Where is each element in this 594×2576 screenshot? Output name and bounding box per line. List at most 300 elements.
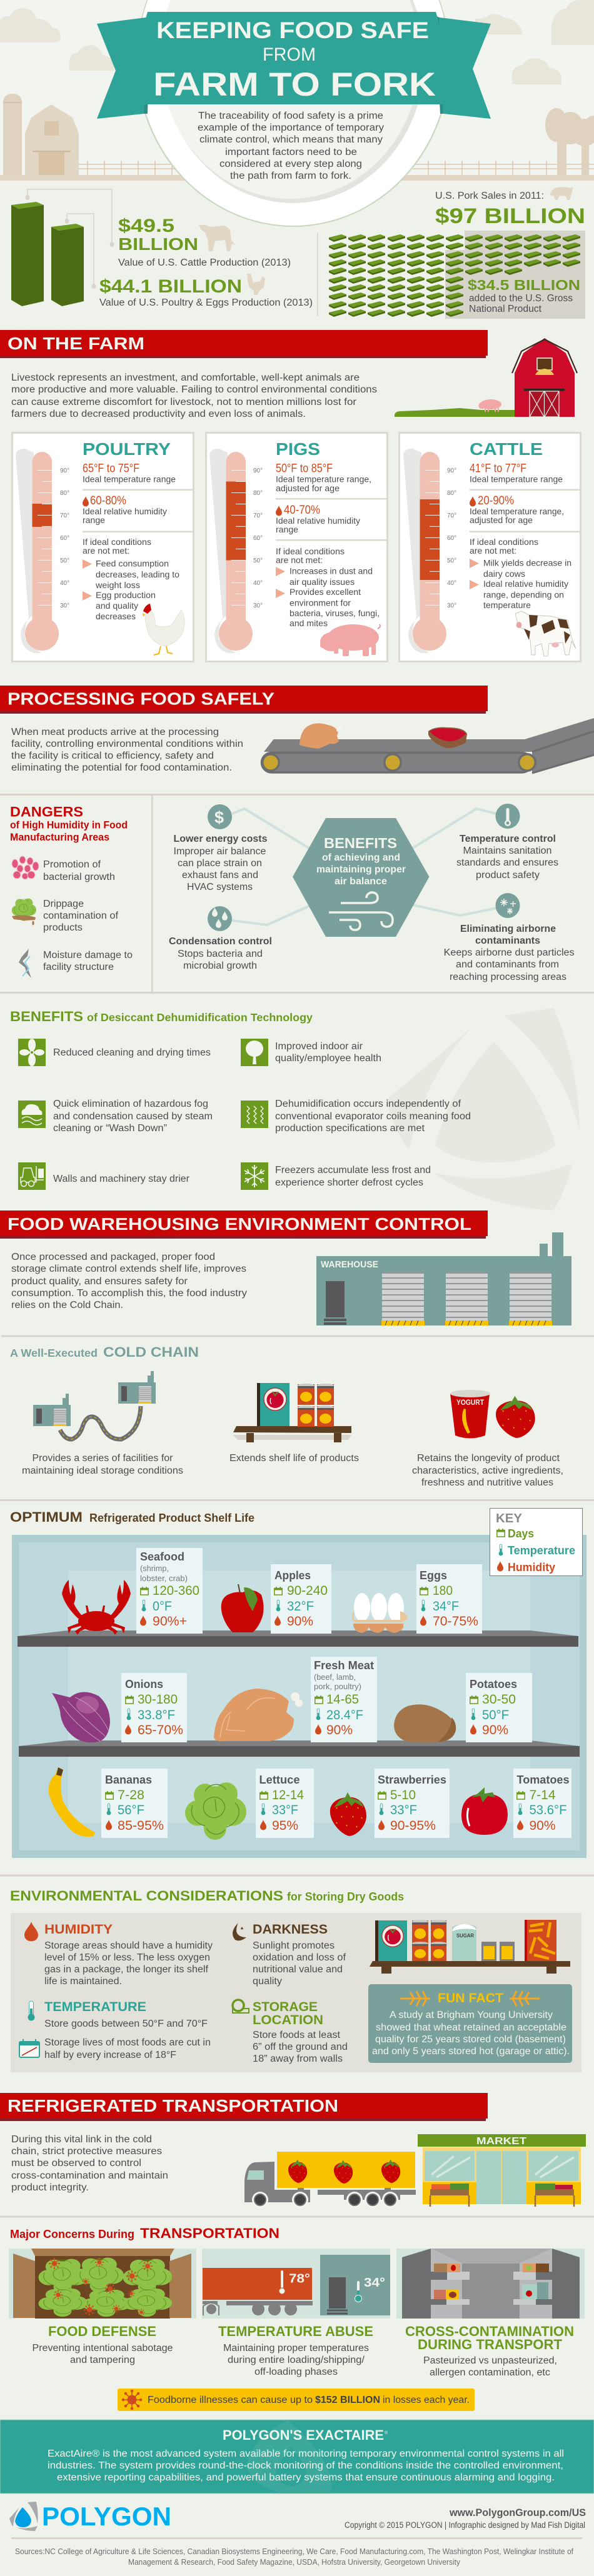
- benefit: temperature control: Temperature control: [460, 834, 556, 844]
- benefit item: fan: Reduced cleaning and drying times: [53, 1047, 211, 1058]
- temperature: TEMPERATURE: [44, 2000, 146, 2014]
- processing text: facility, controlling environmental conditions within: [11, 739, 243, 749]
- poultry temperature: 65°F to 75°F: [83, 462, 139, 475]
- warehousing text: Once processed and packaged, proper food: [11, 1252, 215, 1262]
- ribbon: [97, 12, 491, 119]
- poultry risks: and quality: [96, 601, 138, 611]
- icon: cow silhouette: [199, 225, 235, 251]
- intro text: example of the importance of temporary: [198, 122, 384, 133]
- temperature: [19, 2000, 211, 2060]
- concern: cross-contamination: CROSS-CONTAMINATION: [405, 2324, 574, 2339]
- cattle risks: dairy cows: [483, 569, 525, 579]
- panel heading: dangers: of High Humidity in Food: [10, 819, 128, 831]
- concern: food defense: Preventing intentional sabotage: [33, 2343, 173, 2354]
- cattle humidity: [470, 494, 580, 532]
- info: seafood: (shrimp,: [140, 1564, 169, 1573]
- info: bananas: 7-28: [118, 1788, 144, 1802]
- poultry thermometer: 30°: [60, 602, 69, 609]
- cattle thermometer: 90°: [447, 467, 456, 474]
- processing text: the facility is critical to efficiency, safety and: [11, 751, 214, 761]
- stat: cattle: Value of U.S. Cattle Production (2013): [118, 257, 291, 268]
- icon: pig silhouette: [550, 187, 573, 200]
- danger: bacterial growth: Promotion of: [43, 859, 101, 870]
- benefit item: snowflake: [241, 1162, 431, 1190]
- concern: food defense: FOOD DEFENSE: [48, 2324, 156, 2339]
- danger: drippage: products: [43, 922, 83, 933]
- panel heading: dangers: DANGERS: [10, 804, 83, 820]
- benefit item: coils: production specifications are met: [275, 1123, 425, 1134]
- pictogram: money stacks: [329, 231, 585, 319]
- heading: desiccant benefits: [10, 1009, 313, 1024]
- heading: cold chain: COLD CHAIN: [103, 1344, 199, 1360]
- danger: drippage: contamination of: [43, 911, 119, 921]
- pigs temperature: 50°F to 85°F: [276, 462, 333, 475]
- concern: cross-contamination: allergen contamination, etc: [430, 2367, 550, 2378]
- cattle humidity: adjusted for age: [470, 515, 533, 525]
- illustration: pantry shelf: [370, 1920, 570, 1974]
- info: strawberries: 5-10: [390, 1788, 416, 1802]
- info: fresh meat: Fresh Meat: [314, 1659, 374, 1672]
- poultry humidity: range: [83, 515, 105, 525]
- concern: cross-contamination: DURING TRANSPORT: [418, 2337, 563, 2352]
- pigs thermometer: [209, 449, 263, 653]
- info: seafood: Seafood: [140, 1550, 184, 1563]
- panel heading: dangers: [10, 804, 128, 843]
- info: tomatoes: 7-14: [529, 1788, 556, 1802]
- info: seafood: lobster, crab): [140, 1574, 188, 1583]
- benefit: eliminating contaminants: contaminants: [475, 936, 540, 946]
- icon: cow: [515, 611, 576, 656]
- stat: gross national product: added to the U.S. Gross: [469, 293, 573, 304]
- processing text: When meat products arrive at the processing: [11, 727, 219, 737]
- concern: food defense: and tampering: [70, 2355, 135, 2365]
- title: [153, 17, 436, 103]
- darkness: oxidation and loss of: [253, 1952, 346, 1963]
- heading: desiccant benefits: BENEFITS: [10, 1009, 83, 1024]
- cattle risks: are not met:: [470, 546, 516, 556]
- benefit: lower energy costs: HVAC systems: [187, 882, 253, 892]
- info: strawberries: 90-95%: [390, 1819, 436, 1833]
- humidity: life is maintained.: [44, 1976, 122, 1987]
- pigs thermometer: 60°: [253, 535, 263, 542]
- cattle risks: If ideal conditions: [470, 537, 538, 547]
- storage location: 18” away from walls: [253, 2054, 343, 2064]
- info: seafood: 90%+: [153, 1614, 187, 1629]
- icon: banana: [49, 1767, 95, 1837]
- key: [490, 1509, 583, 1576]
- storage location: Store foods at least: [253, 2030, 341, 2040]
- icon: potato: [394, 1704, 456, 1742]
- title: FROM: [263, 44, 316, 65]
- info: bananas: Bananas: [105, 1774, 152, 1786]
- concern image: cross-contamination: [396, 2249, 585, 2319]
- benefit: condensation control: microbial growth: [183, 961, 257, 971]
- info: eggs: 70-75%: [433, 1614, 478, 1629]
- panel: exactaire: industries. The system provides round-the-clock monitoring of the conditions inside the controlled environment,: [48, 2460, 563, 2471]
- footer: website and copyright: [345, 2507, 586, 2530]
- heading: optimum shelf life: OPTIMUM: [10, 1509, 83, 1525]
- benefit: lower energy costs: Lower energy costs: [174, 834, 268, 844]
- info: apples: 90-240: [287, 1584, 328, 1598]
- cattle temperature: [470, 462, 580, 491]
- title: KEEPING FOOD SAFE: [156, 17, 429, 43]
- benefit: lower energy costs: exhaust fans and: [182, 870, 258, 881]
- info: bananas: 85-95%: [118, 1819, 164, 1833]
- benefits hexagon: maintaining proper: [316, 864, 406, 875]
- stat: pork sales: U.S. Pork Sales in 2011:: [435, 191, 544, 201]
- poultry temperature: [83, 462, 193, 491]
- callout: fun fact: showed that wheat retained an acceptable: [376, 2022, 566, 2033]
- cold chain: yogurt: YOGURT: [456, 1399, 484, 1407]
- info: fresh meat: 14-65: [326, 1692, 359, 1707]
- benefit: temperature control: product safety: [476, 870, 540, 881]
- heading band: refrigerated transportation: REFRIGERATED TRANSPORTATION: [8, 2096, 338, 2115]
- heading: desiccant benefits: of Desiccant Dehumidification Technology: [87, 1011, 313, 1024]
- info: fresh meat: pork, poultry): [314, 1682, 361, 1691]
- poultry risks: weight loss: [95, 580, 140, 590]
- benefit: eliminating contaminants: Eliminating airborne: [460, 924, 556, 934]
- refrigerator: [12, 1535, 586, 1858]
- info: fresh meat: (beef, lamb,: [314, 1672, 356, 1682]
- benefit item: snowflake: Freezers accumulate less frost and: [275, 1165, 431, 1176]
- heading: environmental considerations: ENVIRONMENTAL CONSIDERATIONS: [10, 1888, 283, 1904]
- cold chain: yogurt: characteristics, active ingredients,: [412, 1465, 563, 1476]
- humidity: [24, 1922, 213, 1987]
- heading: environmental considerations: for Storing Dry Goods: [287, 1890, 404, 1903]
- pigs thermometer: 50°: [253, 557, 263, 564]
- pigs risks: air quality issues: [289, 577, 355, 587]
- plate: [136, 0, 450, 227]
- info: potatoes: Potatoes: [470, 1678, 517, 1690]
- benefit: eliminating contaminants: [444, 893, 575, 982]
- illustration: red barn: [512, 338, 577, 417]
- info: fresh meat: 28.4°F: [326, 1708, 363, 1722]
- benefit item: coils: Dehumidification occurs independently of: [275, 1099, 461, 1109]
- stat: cattle: $49.5: [118, 216, 174, 236]
- benefit item: fog: Quick elimination of hazardous fog: [53, 1099, 208, 1109]
- concern image: temperature abuse: 78°: [289, 2272, 310, 2286]
- callout: foodborne illness: $152 BILLION: [315, 2395, 380, 2405]
- benefit item: coils: conventional evaporator coils meaning food: [275, 1111, 471, 1122]
- benefit: condensation control: Stops bacteria and: [178, 949, 263, 959]
- stat: gross national product: $34.5 BILLION: [468, 277, 580, 293]
- panel heading: dangers: Manufacturing Areas: [10, 831, 109, 843]
- benefit: condensation control: [169, 906, 272, 971]
- panel: dry goods: [11, 1913, 581, 2072]
- farm intro text: [11, 372, 377, 419]
- info: potatoes: 50°F: [482, 1708, 509, 1722]
- info: lettuce: 95%: [272, 1819, 298, 1833]
- icon: onion: [52, 1692, 110, 1742]
- title: FARM TO FORK: [153, 66, 436, 103]
- pigs risks: Provides excellent: [289, 587, 361, 597]
- danger: drippage: [12, 899, 119, 933]
- transportation text: [11, 2134, 168, 2193]
- info: tomatoes: 90%: [529, 1819, 555, 1833]
- poultry heading: POULTRY: [83, 439, 171, 459]
- intro text: The traceability of food safety is a prime: [198, 111, 383, 121]
- warehousing text: storage climate control extends shelf life, improves: [11, 1264, 246, 1274]
- benefits hexagon: air balance: [335, 876, 387, 887]
- info: apples: Apples: [274, 1569, 311, 1582]
- icon: crab: [62, 1580, 131, 1635]
- heading: major concerns: Major Concerns During: [10, 2228, 134, 2240]
- connector lines: [232, 809, 496, 925]
- key: Humidity: [508, 1561, 555, 1574]
- footer: sources: [15, 2547, 573, 2567]
- warehousing text: consumption. To accomplish this, the food industry: [11, 1288, 247, 1299]
- panel: exactaire: [0, 2420, 594, 2494]
- panel: exactaire: extensive reporting capabilities, and powerful battery systems that ensure continuous alarming and logging.: [57, 2472, 555, 2483]
- cold chain: shelf products: Extends shelf life of products: [229, 1453, 359, 1464]
- heading band: processing: [0, 686, 488, 714]
- danger: moisture damage: facility structure: [43, 962, 114, 972]
- heading: optimum shelf life: [10, 1509, 254, 1525]
- icon: strawberry: [330, 1792, 366, 1836]
- benefit item: tree: [241, 1039, 381, 1066]
- concern image: temperature abuse: [202, 2249, 390, 2319]
- stat: gross national product: National Product: [469, 304, 542, 314]
- poultry thermometer: 90°: [60, 467, 69, 474]
- concern image: food defense: [9, 2249, 196, 2319]
- cattle risks: range, depending on: [483, 590, 564, 600]
- benefit: eliminating contaminants: Keeps airborne dust particles: [444, 947, 575, 958]
- scene: fence: [79, 161, 594, 175]
- callout: fun fact: and only 5 years stored hot (garage or attic).: [372, 2046, 570, 2057]
- danger: bacterial growth: bacterial growth: [43, 872, 115, 882]
- danger: moisture damage: [19, 949, 133, 978]
- info: lettuce: 12-14: [272, 1788, 304, 1802]
- poultry humidity: Ideal relative humidity: [83, 506, 167, 516]
- warehousing text: relies on the Cold Chain.: [11, 1300, 123, 1310]
- heading band: warehousing: FOOD WAREHOUSING ENVIRONMENT CONTROL: [8, 1214, 471, 1234]
- illustration: conveyor belt: [261, 718, 594, 773]
- pigs temperature: Ideal temperature range,: [276, 474, 371, 484]
- stat: cattle: [118, 216, 291, 268]
- benefit item: fog: [18, 1099, 213, 1134]
- divider: [0, 2216, 594, 2217]
- money bars: [11, 189, 114, 306]
- darkness: quality: [253, 1976, 282, 1987]
- intro text: the path from farm to fork.: [230, 171, 351, 181]
- cold chain: yogurt: freshness and nutritive values: [421, 1477, 553, 1488]
- temperature: half by every increase of 18°F: [44, 2050, 176, 2060]
- callout: foodborne illness: Foodborne illnesses can cause up to: [148, 2395, 313, 2405]
- info: strawberries: 33°F: [390, 1803, 417, 1817]
- info: onions: [121, 1673, 187, 1742]
- storage location: 6” off the ground and: [253, 2042, 348, 2052]
- scene: clouds: [0, 0, 594, 84]
- pigs thermometer: 90°: [253, 467, 263, 474]
- cattle thermometer: 70°: [447, 512, 456, 519]
- scene: ground: [0, 175, 594, 181]
- illustration: market: [418, 2134, 586, 2207]
- concern: temperature abuse: during entire loading/shipping/: [228, 2355, 365, 2365]
- benefits hexagon: [293, 818, 429, 937]
- divider: [11, 2537, 582, 2539]
- stat: poultry: $44.1 BILLION: [99, 276, 242, 297]
- panel: poultry: [13, 432, 194, 661]
- info: potatoes: 30-50: [482, 1692, 516, 1707]
- temperature: Store goods between 50°F and 70°F: [44, 2019, 208, 2029]
- storage location: LOCATION: [253, 2013, 323, 2027]
- info: bananas: [101, 1769, 168, 1838]
- info: eggs: [416, 1564, 482, 1634]
- poultry temperature: Ideal temperature range: [83, 474, 176, 484]
- heading: cold chain: A Well-Executed: [10, 1347, 98, 1359]
- key: KEY: [496, 1512, 523, 1525]
- benefit: temperature control: [456, 804, 558, 881]
- cattle humidity: 20-90%: [478, 494, 514, 507]
- info: eggs: 34°F: [433, 1599, 459, 1614]
- illustration: truck: [244, 2152, 416, 2208]
- humidity: HUMIDITY: [44, 1922, 113, 1937]
- divider: [317, 233, 318, 316]
- humidity: level of 15% or less. The less oxygen: [44, 1952, 210, 1963]
- benefit item: fan: [18, 1039, 211, 1066]
- cattle temperature: Ideal temperature range: [470, 474, 563, 484]
- callout: foodborne illness: [118, 2389, 475, 2411]
- icon: chicken on belt: [300, 723, 343, 749]
- storage location: [233, 2000, 348, 2064]
- callout: foodborne illness: in losses each year.: [383, 2395, 470, 2405]
- info: onions: Onions: [125, 1678, 163, 1690]
- danger: bacterial growth: [12, 856, 115, 882]
- storage location: STORAGE: [253, 2000, 318, 2014]
- cattle thermometer: 30°: [447, 602, 456, 609]
- pigs temperature: [276, 462, 386, 500]
- concern: cross-contamination: [405, 2324, 574, 2378]
- callout: fun fact: [368, 1984, 572, 2063]
- stat: gross national product: [468, 277, 580, 314]
- poultry risks: [83, 537, 179, 621]
- illustration: warehouse: WAREHOUSE: [321, 1259, 378, 1270]
- info: onions: 30-180: [138, 1692, 178, 1707]
- cattle thermometer: 80°: [447, 490, 456, 497]
- pigs humidity: Ideal relative humidity: [276, 516, 360, 526]
- icon: pig: [320, 624, 380, 656]
- benefits hexagon: of achieving and: [322, 852, 400, 863]
- cattle risks: Milk yields decrease in: [483, 558, 571, 568]
- poultry risks: decreases: [96, 611, 136, 621]
- heading band: on the farm: [0, 330, 488, 358]
- benefit: lower energy costs: Improper air balance: [174, 846, 266, 857]
- pigs heading: PIGS: [276, 439, 320, 459]
- warehousing text: [11, 1252, 247, 1310]
- key: Temperature: [508, 1544, 575, 1557]
- poultry risks: Egg production: [96, 590, 156, 600]
- key: Days: [508, 1527, 534, 1540]
- benefit item: tree: quality/employee health: [275, 1053, 381, 1064]
- panel: cattle: [399, 432, 580, 661]
- poultry risks: decreases, leading to: [96, 569, 179, 579]
- concern: temperature abuse: TEMPERATURE ABUSE: [218, 2324, 373, 2339]
- poultry risks: If ideal conditions: [83, 537, 151, 547]
- benefit: lower energy costs: [174, 804, 268, 892]
- icon: hen: [143, 604, 184, 655]
- stat: pork sales: [435, 191, 585, 228]
- illustration: grass and pig: [395, 399, 515, 417]
- stat: poultry: [99, 276, 313, 308]
- panel: exactaire: ®: [385, 2430, 388, 2435]
- pigs risks: environment for: [289, 597, 351, 607]
- icon: tomato: [461, 1787, 508, 1835]
- heading band: warehousing: [0, 1211, 488, 1239]
- poultry thermometer: 50°: [60, 557, 69, 564]
- poultry thermometer: 80°: [60, 490, 69, 497]
- benefit item: snowflake: experience shorter defrost cycles: [275, 1177, 423, 1188]
- heading band: refrigerated transportation: [0, 2093, 488, 2121]
- concern: temperature abuse: [218, 2324, 373, 2377]
- pigs thermometer: 30°: [253, 602, 263, 609]
- benefit item: fog: and condensation caused by steam: [53, 1111, 213, 1122]
- icon: lettuce: [185, 1782, 246, 1840]
- intro text: [198, 111, 384, 181]
- info: bananas: 56°F: [118, 1803, 144, 1817]
- info: seafood: 120-360: [153, 1584, 199, 1598]
- cold chain: facilities: maintaining ideal storage conditions: [22, 1465, 183, 1476]
- info: eggs: 180: [433, 1584, 453, 1598]
- scene: silo and barn: [3, 94, 79, 175]
- illustration: pantry shelf: SUGAR: [456, 1933, 474, 1939]
- info: apples: 32°F: [287, 1599, 314, 1614]
- benefit item: fog: cleaning or “Wash Down”: [53, 1123, 167, 1134]
- benefits hexagon: BENEFITS: [324, 835, 397, 851]
- icon: chicken: [214, 1689, 303, 1741]
- heading band: on the farm: ON THE FARM: [8, 334, 144, 353]
- pigs humidity: [276, 504, 386, 541]
- pigs risks: and mites: [289, 618, 328, 628]
- callout: fun fact: FUN FACT: [438, 1991, 503, 2005]
- intro text: climate control, which means that many: [199, 134, 383, 145]
- divider: [0, 794, 594, 994]
- info: onions: 33.8°F: [138, 1708, 175, 1722]
- info: eggs: Eggs: [420, 1569, 447, 1582]
- farm intro text: more productive and more valuable. Failing to control environmental conditions: [11, 384, 377, 395]
- benefit: eliminating contaminants: reaching processing areas: [450, 972, 566, 982]
- concern: temperature abuse: off-loading phases: [254, 2367, 338, 2377]
- info: strawberries: Strawberries: [378, 1774, 446, 1786]
- stat: cattle: BILLION: [118, 234, 198, 254]
- cattle thermometer: 50°: [447, 557, 456, 564]
- poultry humidity: [83, 494, 193, 532]
- transportation text: During this vital link in the cold: [11, 2134, 152, 2145]
- stat: poultry: Value of U.S. Poultry & Eggs Production (2013): [99, 297, 313, 308]
- heading: environmental considerations: [10, 1888, 404, 1904]
- danger: drippage: Drippage: [43, 899, 84, 909]
- info: apples: [271, 1564, 331, 1634]
- stat: pork sales: $97 BILLION: [435, 204, 585, 228]
- humidity: gas in a package, the longer its shelf: [44, 1964, 209, 1975]
- concern: food defense: [33, 2324, 173, 2365]
- heading: major concerns: [10, 2225, 279, 2241]
- poultry thermometer: [16, 449, 69, 653]
- logo: polygon: POLYGON: [42, 2502, 171, 2531]
- info: tomatoes: [513, 1769, 571, 1838]
- pigs thermometer: 40°: [253, 580, 263, 587]
- info: fresh meat: 90%: [326, 1723, 353, 1737]
- pigs risks: [276, 546, 380, 628]
- cattle humidity: Ideal temperature range,: [470, 506, 564, 516]
- info: lettuce: Lettuce: [259, 1774, 300, 1786]
- warehousing text: product quality, and ensures safety for: [11, 1276, 188, 1287]
- cattle thermometer: 40°: [447, 580, 456, 587]
- icon: hen silhouette: [247, 274, 265, 295]
- cattle heading: CATTLE: [470, 439, 543, 459]
- cold chain: facilities: [22, 1371, 183, 1476]
- transportation text: chain, strict protective measures: [11, 2146, 162, 2157]
- farm intro text: Livestock represents an investment, and comfortable, well-kept animals are: [11, 372, 360, 383]
